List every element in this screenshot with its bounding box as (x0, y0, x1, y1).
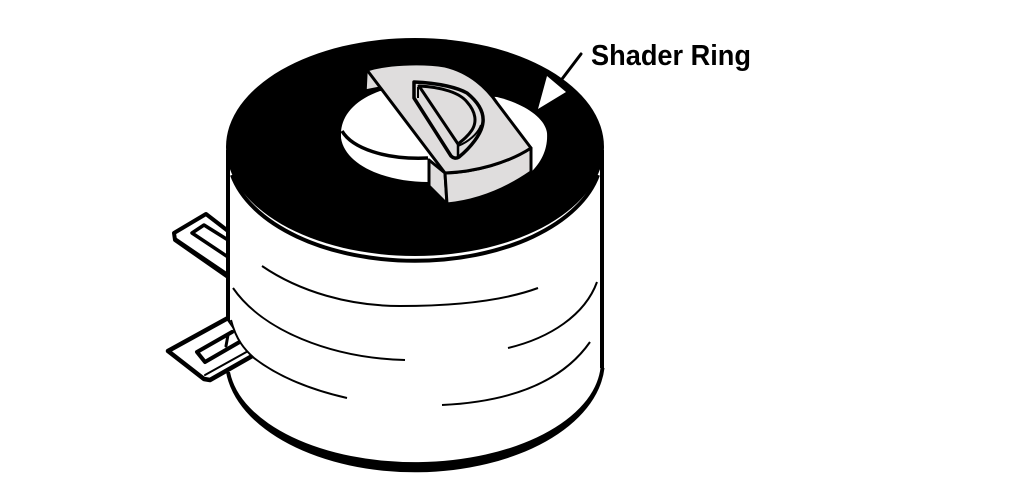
coil bottom crescent (226, 368, 604, 472)
central pole hole and core disc (341, 91, 547, 182)
coil body (226, 150, 604, 472)
winding lines (231, 266, 597, 405)
shader ring (366, 64, 531, 204)
label: Shader Ring: Shader Ring (591, 40, 751, 72)
top rim line (232, 175, 598, 261)
raised half-disc (414, 82, 483, 158)
upper terminal tab (174, 214, 228, 277)
arrow pointing to shader ring (538, 54, 581, 109)
ring back wedge (366, 70, 381, 90)
ring side left face (429, 160, 447, 204)
ring front face (445, 148, 531, 204)
black top face of coil (226, 38, 604, 256)
lower terminal tab (168, 318, 254, 380)
ring top face (367, 64, 531, 173)
